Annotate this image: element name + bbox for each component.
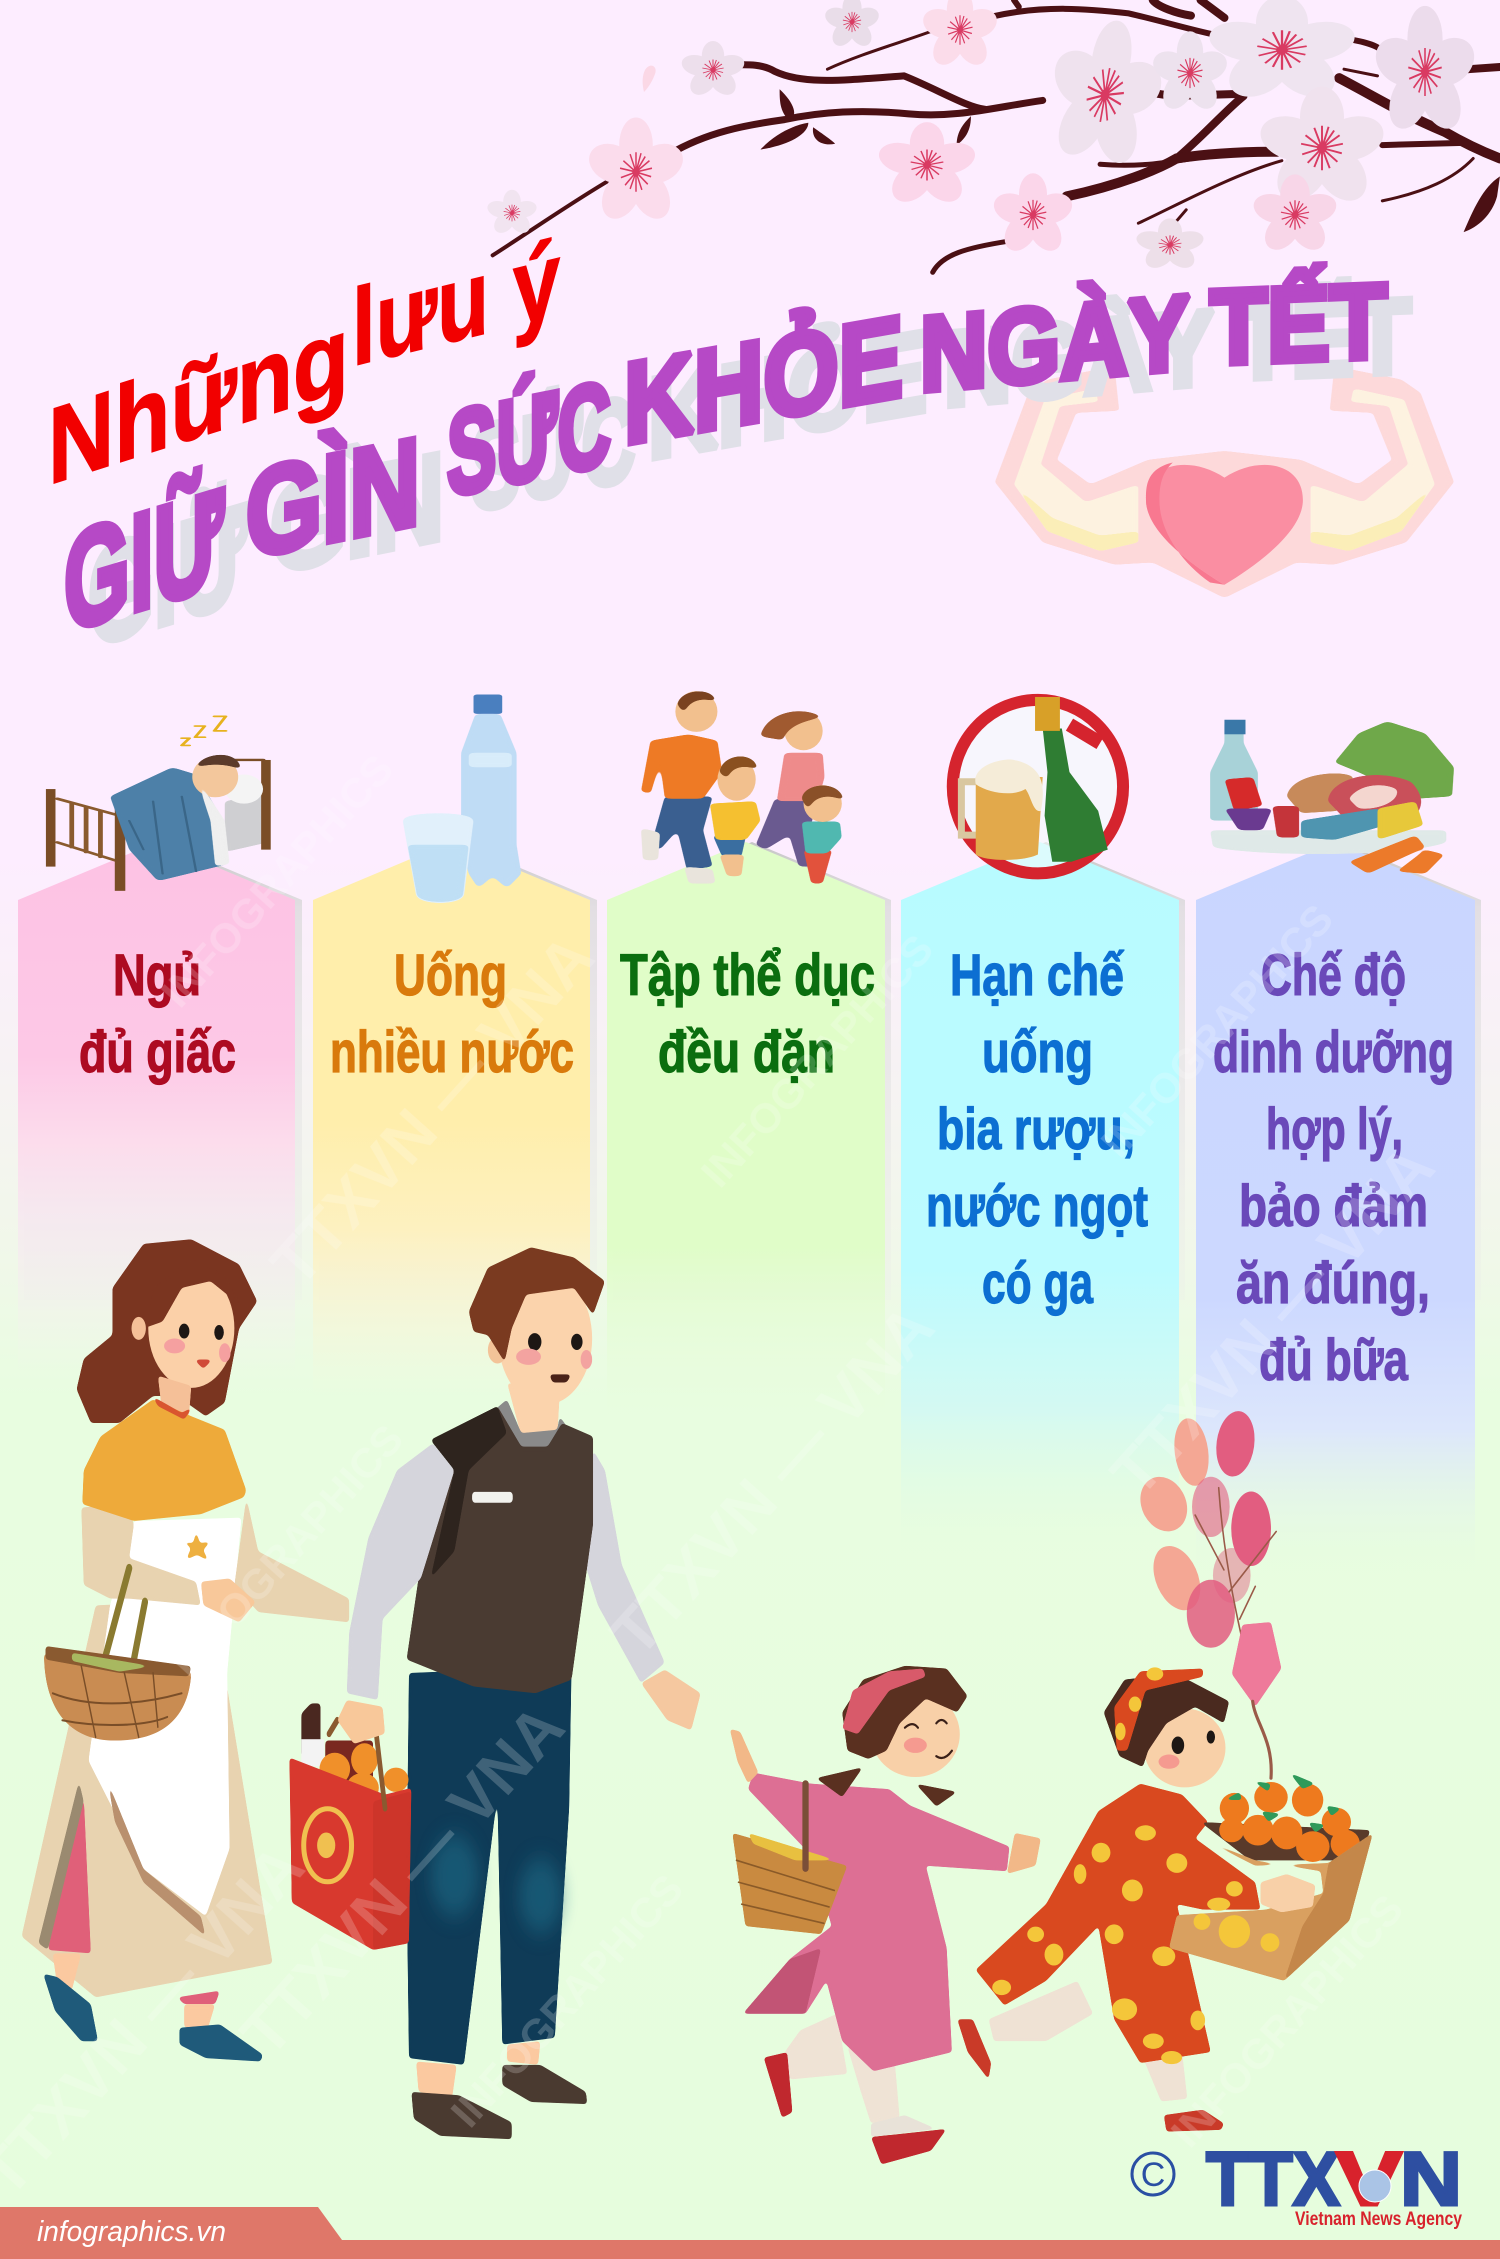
title shadow: SỨC — [471, 371, 635, 537]
panel: sleep — [18, 842, 302, 1376]
label: Ngủ đủ giấc — [79, 943, 236, 1085]
label: Chế độ dinh dưỡng hợp lý, bảo đảm ăn đúng, đủ bữa: đủ bữa — [1259, 1328, 1409, 1393]
agency wordmark: TTX — [1206, 2137, 1340, 2222]
title: Giữ gìn sức khỏe ngày Tết: TẾT — [1210, 262, 1387, 387]
illustration: mother and father — [22, 1239, 701, 2139]
label: Hạn chế uống bia rượu, nước ngọt có ga: nước ngọt — [926, 1174, 1148, 1239]
zzz — [182, 716, 226, 745]
watermark: TTXVN — VNA — [597, 1291, 948, 1669]
watermark: INFOGRAPHICS — [162, 1415, 412, 1686]
icon: flexing arms with heart — [995, 366, 1454, 598]
watermark: TTXVN — VNA — [257, 921, 608, 1299]
label: Hạn chế uống bia rượu, nước ngọt có ga: bia rượu, — [937, 1097, 1135, 1162]
label: Chế độ dinh dưỡng hợp lý, bảo đảm ăn đúng, đủ bữa — [1213, 943, 1454, 1393]
copyright symbol: C — [1141, 2156, 1165, 2194]
label: Hạn chế uống bia rượu, nước ngọt có ga: có ga — [982, 1251, 1094, 1316]
footer bar — [0, 2207, 1500, 2259]
title shadow — [88, 277, 1411, 676]
girl with basket — [730, 1666, 1041, 2164]
blossom branch decoration — [485, 0, 1500, 272]
label: Ngủ đủ giấc: đủ giấc — [79, 1020, 236, 1085]
watermark: TTXVN — VNA — [227, 1691, 578, 2069]
icon: no alcohol sign — [953, 697, 1123, 873]
panel: nutrition — [1196, 842, 1481, 1575]
label: Hạn chế uống bia rượu, nước ngọt có ga: uống — [982, 1020, 1093, 1085]
label: Uống nhiều nước: nhiều nước — [330, 1020, 574, 1085]
panel: exercise — [607, 842, 891, 1420]
peach blossom tree — [1131, 1409, 1281, 1778]
label: Tập thể dục đều đặn: đều đặn — [658, 1020, 835, 1085]
icons row — [46, 691, 1454, 903]
label: Uống nhiều nước: Uống — [394, 943, 507, 1008]
panel: water — [313, 842, 597, 1396]
mother — [22, 1239, 349, 2062]
label: Chế độ dinh dưỡng hợp lý, bảo đảm ăn đúng, đủ bữa: Chế độ — [1261, 943, 1406, 1008]
watermark: INFOGRAPHICS — [152, 745, 402, 1016]
watermark: INFOGRAPHICS — [1162, 1885, 1412, 2156]
title: Giữ gìn sức khỏe ngày Tết — [64, 262, 1387, 661]
label: Hạn chế uống bia rượu, nước ngọt có ga: Hạn chế — [950, 943, 1125, 1008]
title: Những lưu ý — [48, 218, 560, 508]
agency wordmark: Vietnam News Agency — [1295, 2209, 1462, 2230]
title: Giữ gìn sức khỏe ngày Tết: GÌN — [246, 411, 420, 585]
father — [289, 1247, 701, 2139]
label: Chế độ dinh dưỡng hợp lý, bảo đảm ăn đúng, đủ bữa: ăn đúng, — [1236, 1251, 1430, 1316]
label: Uống nhiều nước — [330, 943, 574, 1085]
illustration: children — [730, 1409, 1373, 2164]
icon: sleeping in bed — [46, 716, 271, 891]
watermark: INFOGRAPHICS — [692, 925, 942, 1196]
icon: water bottle and glass — [403, 695, 521, 903]
title: Những lưu ý: lưu ý — [352, 218, 560, 390]
title shadow: NGÀY — [944, 287, 1214, 429]
agency wordmark: N — [1400, 2137, 1462, 2222]
icon: healthy food plate — [1210, 720, 1454, 874]
logo: TTXVN Vietnam News Agency — [1132, 2137, 1462, 2230]
panel: limit alcohol — [901, 842, 1185, 1553]
label: Tập thể dục đều đặn — [620, 943, 875, 1085]
label: Ngủ đủ giấc: Ngủ — [113, 943, 201, 1008]
icon: family running — [641, 691, 844, 884]
watermark — [0, 745, 1448, 2209]
label: Chế độ dinh dưỡng hợp lý, bảo đảm ăn đúng, đủ bữa: hợp lý, — [1266, 1097, 1403, 1162]
label: Chế độ dinh dưỡng hợp lý, bảo đảm ăn đúng, đủ bữa: bảo đảm — [1239, 1174, 1428, 1239]
watermark: TTXVN — VNA — [1097, 1131, 1448, 1509]
agency wordmark — [1206, 2137, 1462, 2230]
title shadow: GÌN — [270, 426, 444, 600]
title: Những lưu ý: Những — [48, 292, 349, 508]
source: infographics.vn: infographics.vn — [37, 2216, 226, 2248]
label: Hạn chế uống bia rượu, nước ngọt có ga — [926, 943, 1148, 1316]
title shadow: TẾT — [1234, 277, 1411, 402]
title shadow: GIỮ — [88, 474, 249, 676]
red shopping bag — [289, 1700, 411, 1950]
title: Giữ gìn sức khỏe ngày Tết: GIỮ — [64, 459, 225, 661]
title: Giữ gìn sức khỏe ngày Tết: SỨC — [447, 356, 611, 522]
blossoms — [485, 0, 1479, 272]
title: Giữ gìn sức khỏe ngày Tết: KHỎE — [624, 291, 903, 469]
title shadow: KHỎE — [648, 306, 927, 484]
watermark: INFOGRAPHICS — [442, 1865, 692, 2136]
title line 2 with shadow — [64, 262, 1411, 676]
agency wordmark: V — [1336, 2137, 1402, 2222]
label: Tập thể dục đều đặn: Tập thể dục — [620, 943, 875, 1008]
title: Giữ gìn sức khỏe ngày Tết: NGÀY — [920, 272, 1190, 414]
watermark: INFOGRAPHICS — [1092, 895, 1342, 1166]
boy with potted tree — [957, 1409, 1373, 2132]
copyright symbol — [1132, 2153, 1174, 2195]
